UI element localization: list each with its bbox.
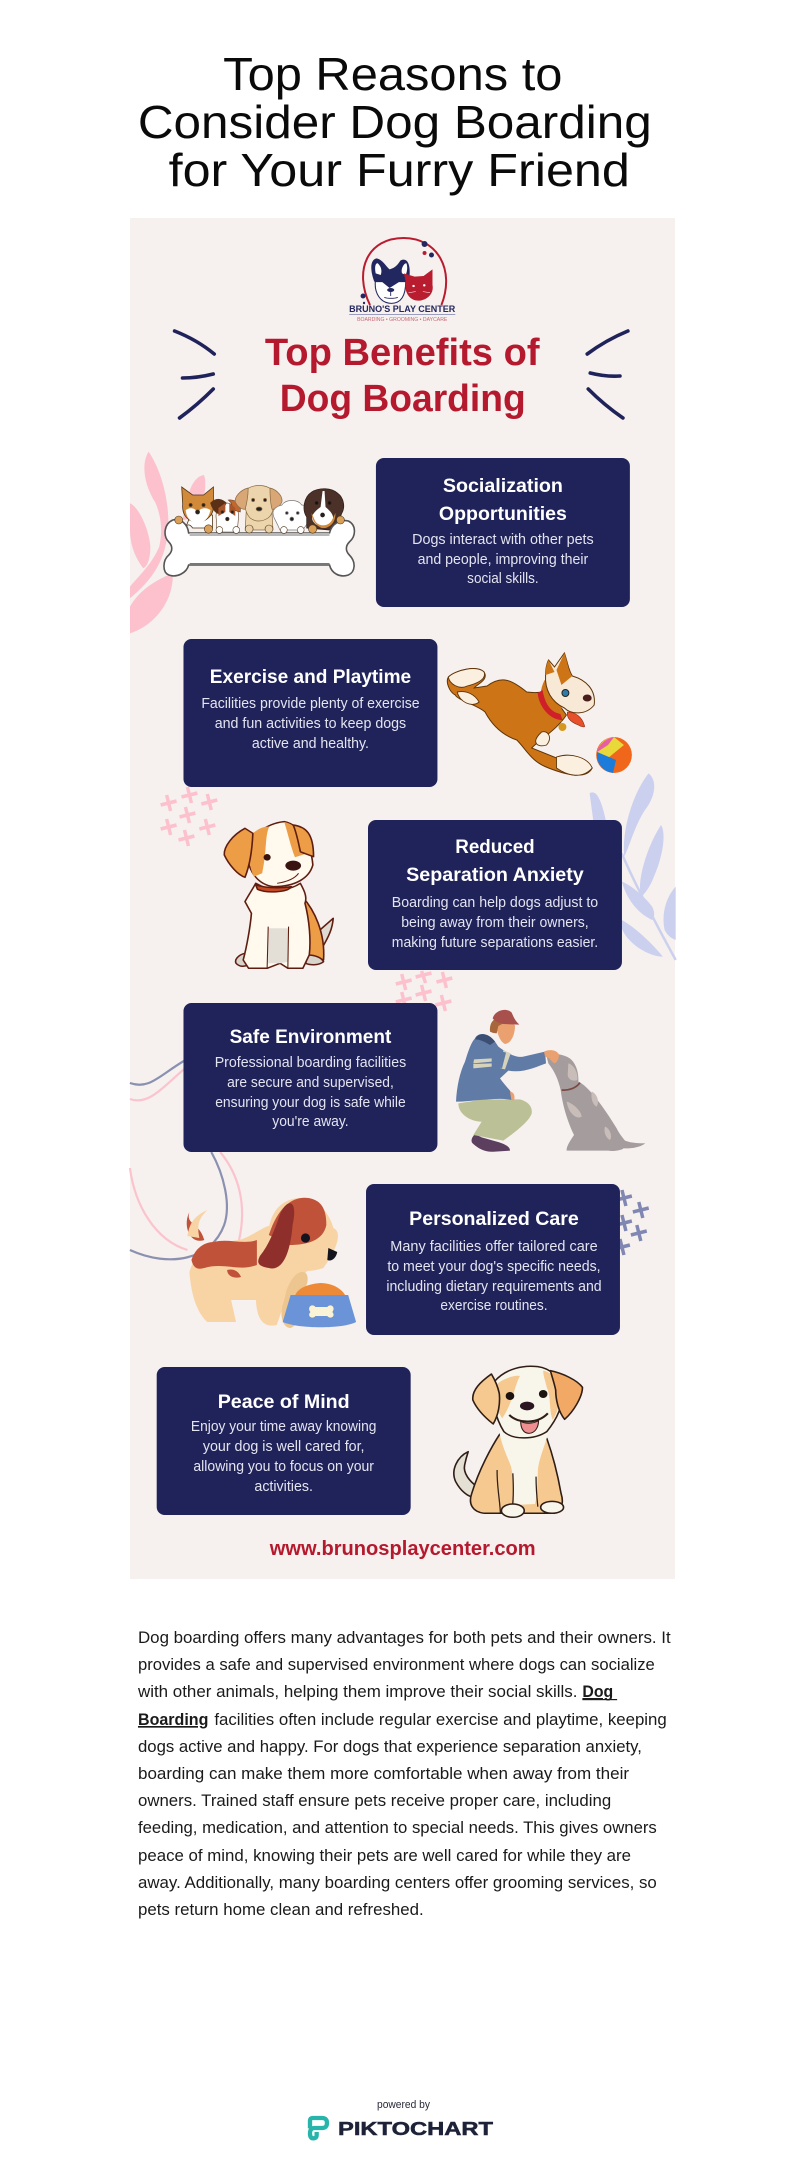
card 6: Peace of Mind: Peace of Mind	[218, 1391, 350, 1413]
card 4: Safe Environment: you're away.	[272, 1114, 349, 1130]
footer: powered by Piktochart: powered by	[377, 2099, 430, 2111]
icon: colourful ball	[596, 737, 632, 773]
body paragraph: owners. Trained staff ensure pets receive proper care, including	[138, 1792, 611, 1810]
card 4: Safe Environment: Professional boarding facilities	[215, 1055, 406, 1071]
illustration: man petting dog	[456, 1010, 645, 1152]
logo: Bruno's Play Center: BRUNO'S PLAY CENTER	[349, 304, 456, 314]
dog 2 terrier	[210, 499, 240, 532]
body paragraph: facilities often include regular exercise and playtime, keeping	[214, 1711, 667, 1729]
heading: Top Benefits of Dog Boarding	[265, 332, 540, 420]
card 4: Safe Environment: Safe Environment	[230, 1026, 392, 1048]
paws	[175, 516, 344, 533]
panel: infographic background	[130, 218, 675, 1579]
card 3: Reduced Separation Anxiety: Reduced	[455, 836, 535, 858]
card 3: Reduced Separation Anxiety: making future separations easier.	[392, 935, 598, 951]
logo: Bruno's Play Center	[349, 238, 456, 323]
card 4: Safe Environment	[183, 1003, 437, 1152]
card 3: Reduced Separation Anxiety: being away from their owners,	[401, 915, 589, 931]
plus pattern: navy right	[614, 1190, 649, 1255]
body paragraph: Dog boarding offers many advantages for both pets and their owners. It	[138, 1629, 671, 1647]
card 5: Personalized Care: to meet your dog's specific needs,	[387, 1259, 601, 1275]
card 4: Safe Environment: are secure and supervised,	[227, 1075, 394, 1091]
illustration: five dogs on a bone	[164, 486, 354, 576]
icon: left burst strokes	[175, 331, 214, 418]
body paragraph: feeding, medication, and attention to special needs. This gives owners	[138, 1819, 657, 1837]
card 1: Socialization Opportunities: Opportunities	[439, 503, 567, 525]
body paragraph: boarding can make them more comfortable when away from their	[138, 1765, 630, 1783]
card 3: Reduced Separation Anxiety: Boarding can help dogs adjust to	[392, 895, 598, 911]
body paragraph	[137, 1629, 671, 1919]
title: Consider Dog Boarding	[138, 97, 652, 148]
card 1: Socialization Opportunities	[376, 458, 630, 607]
card 1: Socialization Opportunities: social skills.	[467, 571, 539, 587]
body paragraph: Boarding	[138, 1711, 208, 1729]
card 6: Peace of Mind	[157, 1367, 411, 1515]
dog 1 shiba	[182, 487, 214, 530]
body paragraph: dogs active and happy. For dogs that experience separation anxiety,	[138, 1738, 642, 1756]
bone	[164, 520, 354, 576]
card 4: Safe Environment: ensuring your dog is safe while	[215, 1095, 406, 1111]
plus pattern: pink lower middle	[396, 971, 452, 1011]
body paragraph: with other animals, helping them improve their social skills.	[137, 1683, 577, 1701]
body paragraph: peace of mind, knowing their pets are well cared for while they are	[138, 1847, 631, 1865]
body paragraph: Dog	[582, 1683, 613, 1701]
body paragraph: away. Additionally, many boarding centers offer grooming services, so	[138, 1874, 657, 1892]
logo: Bruno's Play Center: BOARDING • GROOMING • DAYCARE	[357, 317, 448, 323]
body paragraph: pets return home clean and refreshed.	[138, 1901, 424, 1919]
card 3: Reduced Separation Anxiety	[368, 820, 622, 970]
heading: Top Benefits of Dog Boarding: Dog Boarding	[280, 378, 526, 420]
icon: Piktochart logo	[310, 2118, 327, 2138]
dog 5 bernese	[304, 489, 344, 530]
illustration: beagle with food bowl	[187, 1198, 356, 1328]
card 5: Personalized Care: exercise routines.	[440, 1298, 548, 1314]
bowl	[283, 1283, 356, 1327]
body paragraph: provides a safe and supervised environment where dogs can socialize	[138, 1656, 655, 1674]
icon: right burst strokes	[587, 331, 628, 418]
card 2: Exercise and Playtime: Exercise and Playtime	[210, 666, 411, 688]
card 2: Exercise and Playtime: and fun activities to keep dogs	[215, 716, 406, 732]
card 5: Personalized Care: including dietary requirements and	[386, 1279, 602, 1295]
card 6: Peace of Mind: activities.	[254, 1479, 313, 1495]
title: Top Reasons to	[223, 49, 562, 100]
card 1: Socialization Opportunities: and people, improving their	[418, 552, 588, 568]
hoodie	[456, 1034, 546, 1102]
pink leaf decoration	[130, 452, 205, 633]
dog and cat heads	[371, 258, 433, 303]
illustration: running dog	[447, 653, 594, 775]
card 5: Personalized Care: Personalized Care	[409, 1208, 579, 1230]
dog 3 labrador	[235, 486, 282, 530]
shoe	[472, 1134, 510, 1152]
card 2: Exercise and Playtime	[183, 639, 437, 787]
card 5: Personalized Care: Many facilities offer tailored care	[390, 1239, 598, 1255]
heading: Top Benefits of Dog Boarding: Top Benefits of	[265, 332, 540, 374]
card 5: Personalized Care	[366, 1184, 620, 1335]
website link: www.brunosplaycenter.com	[269, 1538, 536, 1560]
pants	[458, 1099, 532, 1141]
card 2: Exercise and Playtime: Facilities provide plenty of exercise	[201, 696, 420, 712]
lilac leaf decoration	[590, 773, 676, 960]
squiggle lines	[130, 1060, 242, 1259]
footer: powered by Piktochart	[310, 2099, 493, 2139]
card 1: Socialization Opportunities: Dogs interact with other pets	[412, 532, 594, 548]
card 2: Exercise and Playtime: active and healthy.	[252, 736, 369, 752]
card 6: Peace of Mind: your dog is well cared for,	[203, 1439, 365, 1455]
illustration: sitting puppy	[224, 822, 333, 968]
footer: powered by Piktochart: PIKTOCHART	[338, 2119, 493, 2139]
hand	[544, 1050, 559, 1063]
title	[138, 49, 652, 196]
title: for Your Furry Friend	[169, 145, 630, 196]
card 3: Reduced Separation Anxiety: Separation Anxiety	[406, 864, 584, 886]
illustration: happy smiling puppy	[454, 1366, 582, 1517]
head	[497, 1023, 515, 1044]
plus pattern: pink upper left	[161, 787, 217, 846]
card 1: Socialization Opportunities: Socialization	[443, 475, 563, 497]
dog	[546, 1054, 645, 1151]
card 6: Peace of Mind: allowing you to focus on your	[193, 1459, 374, 1475]
dog 4 white fluffy	[273, 500, 312, 530]
card 6: Peace of Mind: Enjoy your time away knowing	[191, 1419, 376, 1435]
